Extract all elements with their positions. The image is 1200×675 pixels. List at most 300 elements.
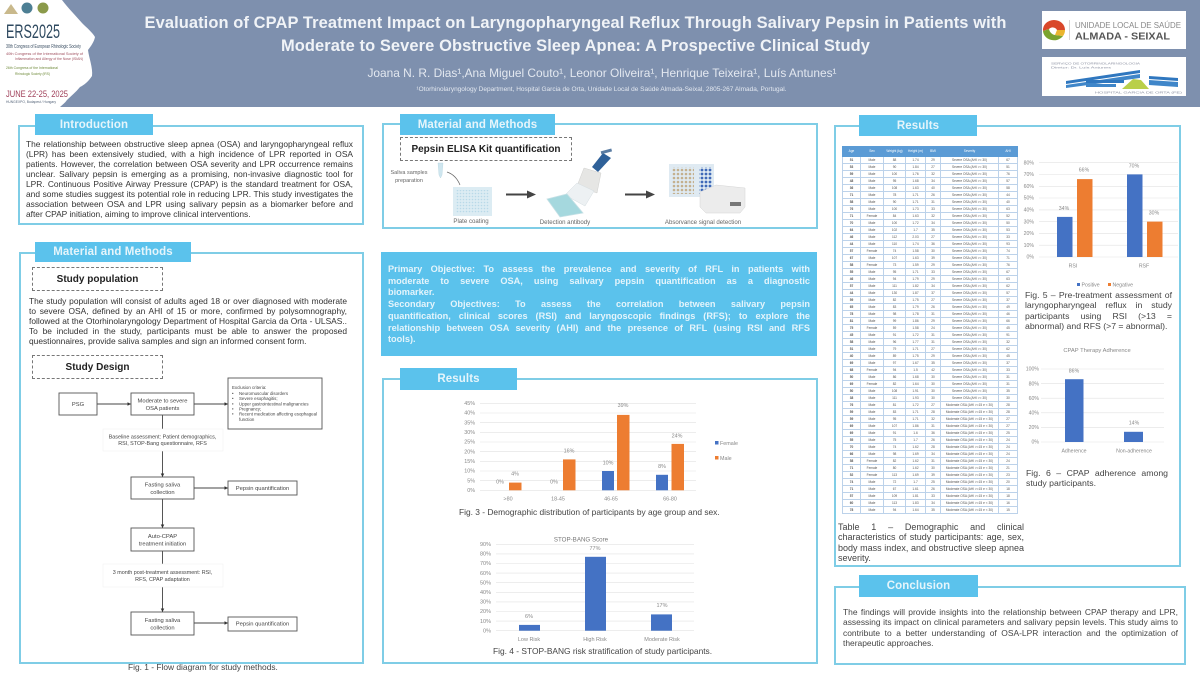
table: participant characteristics: Female — [867, 214, 877, 218]
bar chart: age group and sex: 24% — [672, 434, 683, 440]
table: participant characteristics: 94 — [893, 276, 896, 280]
table: participant characteristics: 113 — [892, 500, 897, 504]
table: participant characteristics: 24 — [1006, 438, 1010, 442]
bar chart: RSI and RFS: 30% — [1149, 210, 1160, 216]
logo: Hospital Garcia de Orta — [1042, 57, 1186, 96]
bar chart: STOP-BANG score: 20% — [480, 609, 491, 615]
table: participant characteristics: 74 — [893, 248, 896, 252]
box: fasting saliva collection 2: collection — [150, 626, 175, 632]
box: baseline assessment: RSI, STOP-Bang questionnaire, RFS — [118, 441, 207, 447]
bar chart: STOP-BANG score: 50% — [480, 580, 491, 586]
table: participant characteristics: 1.7 — [913, 438, 918, 442]
table: participant characteristics: 1.69 — [912, 452, 919, 456]
caption: figure 6: study participants. — [1026, 478, 1096, 488]
table: participant characteristics: 1.74 — [912, 242, 919, 246]
bar chart: RSI and RFS: 60% — [1024, 184, 1034, 190]
table: participant characteristics: Moderate OSA (AHI >=15 e < 30) — [946, 508, 993, 512]
table: participant characteristics: 59 — [850, 410, 853, 414]
box: 3 month assessment: RFS, CPAP adaptation — [135, 577, 190, 583]
table: participant characteristics: 28 — [931, 444, 935, 448]
table: participant characteristics: 67 — [1006, 270, 1010, 274]
bar chart: RSI and RFS: 80% — [1024, 160, 1034, 166]
text block: objectives: moderate to severe OSA, using salivary pepsin quantification as a diagnostic — [388, 276, 810, 286]
heading: Results — [859, 115, 977, 136]
bar chart: age group and sex: 0% — [467, 488, 475, 494]
table: participant characteristics: Moderate OSA (AHI >=15 e < 30) — [946, 444, 993, 448]
conference logo: ERS2025: HUNGEXPO, Budapest / Hungary — [6, 99, 56, 104]
text block: introduction: association between OSA and LPR using salivary pepsin as a biomarker before and — [26, 199, 353, 209]
table: participant characteristics: Male — [869, 304, 875, 308]
table: participant characteristics: 1.84 — [912, 164, 919, 168]
table: participant characteristics: 62 — [1006, 284, 1010, 288]
text block: introduction: (LPR) has been extensively studied, with a high incidence of LPR reported in OSA — [26, 149, 353, 159]
caption: table 1: body mass index, and obstructive sleep apnea — [838, 542, 1024, 552]
table: participant characteristics: 36 — [850, 186, 853, 190]
panel: material and methods, study population and design — [19, 242, 364, 664]
table: participant characteristics: Severe OSA (AHI >= 30) — [952, 284, 987, 288]
box: exclusion criteria: • — [232, 402, 234, 406]
table: participant characteristics: 63 — [1006, 206, 1010, 210]
table: participant characteristics: 27 — [1006, 416, 1010, 420]
bar chart: CPAP therapy adherence: Adherence — [1061, 448, 1087, 454]
table: participant characteristics: 1.77 — [912, 340, 919, 344]
table: participant characteristics: Severe OSA (AHI >= 30) — [952, 220, 987, 224]
table: participant characteristics: 76 — [1006, 262, 1010, 266]
table: participant characteristics: Severe OSA (AHI >= 30) — [952, 298, 987, 302]
conference logo: ERS2025: JUNE 22-25, 2025 — [6, 89, 68, 100]
table: participant characteristics: 27 — [931, 402, 935, 406]
table: participant characteristics: Severe OSA (AHI >= 30) — [952, 192, 987, 196]
table: participant characteristics: 51 — [850, 346, 853, 350]
table: participant characteristics: 1.82 — [912, 284, 919, 288]
bar chart: age group and sex: 10% — [603, 460, 614, 466]
icon: sample tube — [438, 163, 443, 178]
bar chart: age group and sex: 0% — [496, 480, 504, 486]
table: participant characteristics: Age — [849, 149, 854, 153]
text block: conclusion: The findings will provide insights into the relationship between CPAP therapy and LPR, — [843, 607, 1178, 617]
table: participant characteristics: 71 — [850, 486, 853, 490]
icon: curved arrow — [447, 172, 460, 185]
panel: introduction — [18, 114, 364, 225]
table: participant characteristics: 102 — [892, 228, 897, 232]
label: detection antibody: Detection antibody — [540, 219, 591, 226]
label: saliva samples preparation — [390, 170, 428, 184]
box: moderate to severe OSA: OSA patients — [146, 406, 180, 412]
table: participant characteristics: 2.03 — [912, 234, 919, 238]
box: exclusion criteria: Exclusion criteria: — [232, 385, 266, 390]
table: participant characteristics: 90 — [893, 200, 896, 204]
table: participant characteristics: 95 — [893, 416, 896, 420]
table: participant characteristics: 1.87 — [912, 290, 919, 294]
table: participant characteristics: Female — [867, 262, 877, 266]
arrow: step one to two — [506, 190, 536, 198]
table: participant characteristics: 90 — [893, 164, 896, 168]
text block: study population: questionnaires, provide saliva samples and sign an informed consent form. — [29, 336, 306, 346]
table: participant characteristics: 1.68 — [912, 178, 919, 182]
text block: objectives: biomarker. — [388, 287, 434, 297]
table: participant characteristics: 49 — [1006, 304, 1010, 308]
bar chart: age group and sex: 0% — [550, 480, 558, 486]
table: participant characteristics: 98 — [893, 452, 896, 456]
table: participant characteristics: 37 — [1006, 360, 1010, 364]
table: participant characteristics: 71 — [850, 466, 853, 470]
title: Moderate to Severe Obstructive Sleep Apnea: A Prospective Clinical Study — [281, 36, 870, 54]
table: participant characteristics: 32 — [931, 416, 935, 420]
heading: Material and Methods — [35, 242, 191, 262]
table: participant characteristics: Severe OSA (AHI >= 30) — [952, 214, 987, 218]
bar chart: CPAP therapy adherence: 20% — [1029, 425, 1039, 431]
table: participant characteristics: 15 — [1006, 508, 1010, 512]
table: participant characteristics: 69 — [850, 360, 853, 364]
caption: table 1: Table 1 – Demographic and clinical — [838, 522, 1024, 532]
logo: Hospital Garcia de Orta: HOSPITAL GARCIA DE ORTA (FE) — [1095, 90, 1182, 94]
caption: figure 5: participants using RSI (>13 = — [1025, 311, 1172, 321]
bar chart: age group and sex: Male — [720, 456, 732, 462]
bar chart: STOP-BANG score: 0% — [483, 628, 491, 634]
table: participant characteristics: 1.74 — [912, 158, 919, 162]
table: participant characteristics: 96 — [893, 340, 896, 344]
table: participant characteristics: Male — [869, 494, 875, 498]
bar chart: RSI and RFS: RSI — [1069, 264, 1077, 270]
arrows — [97, 404, 228, 623]
title: Evaluation of CPAP Treatment Impact on Laryngopharyngeal Reflux Through Salivary Pepsin in Patients with — [145, 14, 1006, 32]
table: participant characteristics: 29 — [931, 318, 935, 322]
table: participant characteristics: 1.7 — [913, 228, 918, 232]
table: participant characteristics: 109 — [892, 494, 897, 498]
caption: figure 6: Fig. 6 – CPAP adherence among — [1026, 468, 1168, 478]
table: participant characteristics: 53 — [850, 164, 853, 168]
table: participant characteristics: 30 — [931, 382, 935, 386]
table: participant characteristics: 73 — [893, 262, 896, 266]
bar chart: RSI and RFS: RSF — [1139, 264, 1149, 270]
bar chart: CPAP therapy adherence: 0% — [1032, 440, 1039, 446]
table: participant characteristics: 79 — [893, 346, 896, 350]
box: exclusion criteria: Neuromuscular disorders — [239, 391, 289, 396]
table: participant characteristics: Severe OSA (AHI >= 30) — [952, 164, 987, 168]
table: participant characteristics: 1.63 — [912, 214, 919, 218]
table: participant characteristics: 59 — [893, 326, 896, 330]
table: participant characteristics: 29 — [931, 354, 935, 358]
table: participant characteristics: 130 — [892, 290, 897, 294]
ELISA workflow illustration — [390, 148, 746, 226]
table: participant characteristics: 1.6 — [913, 430, 918, 434]
bar chart: age group and sex: 40% — [464, 411, 475, 417]
bar chart: STOP-BANG score: 80% — [480, 552, 491, 558]
table: participant characteristics: 76 — [850, 402, 853, 406]
table: participant characteristics: 57 — [1006, 290, 1010, 294]
text block: objectives: relationship between OSA severity (AHI) and the presence of RFL (using RSI and RFS — [388, 323, 810, 333]
panel frame — [19, 252, 364, 664]
table: participant characteristics: Male — [869, 410, 875, 414]
table: participant characteristics: 81 — [893, 402, 896, 406]
table: participant characteristics: 58 — [850, 262, 853, 266]
table: participant characteristics: 80 — [893, 466, 896, 470]
table: participant characteristics: Severe OSA (AHI >= 30) — [952, 256, 987, 260]
bar chart: age group and sex: 8% — [658, 464, 666, 470]
box: exclusion criteria: Recent medication affecting esophageal — [239, 412, 317, 416]
table: participant characteristics: 108 — [892, 388, 897, 392]
box: moderate to severe OSA: Moderate to severe — [138, 398, 187, 404]
table: participant characteristics: Male — [869, 424, 875, 428]
table: participant characteristics: Severe OSA (AHI >= 30) — [952, 228, 987, 232]
table: participant characteristics: 94 — [893, 508, 896, 512]
table: participant characteristics: 32 — [931, 214, 935, 218]
table: participant characteristics: 60 — [850, 500, 853, 504]
table: participant characteristics: 1.64 — [912, 382, 919, 386]
table: participant characteristics: 28 — [1006, 402, 1010, 406]
table: participant characteristics: 65 — [850, 304, 853, 308]
table: participant characteristics: Male — [869, 430, 875, 434]
table: participant characteristics: 111 — [892, 396, 897, 400]
table: participant characteristics: Male — [869, 340, 875, 344]
table: participant characteristics: 71 — [850, 192, 853, 196]
table: participant characteristics: 33 — [931, 206, 935, 210]
table: participant characteristics: 18 — [1006, 486, 1010, 490]
text block: conclusion — [843, 607, 1178, 648]
caption: figure 6 — [1026, 468, 1168, 488]
table: participant characteristics: 95 — [893, 178, 896, 182]
table: participant characteristics: 1.62 — [912, 458, 919, 462]
table: participant characteristics: 78 — [850, 312, 853, 316]
box: fasting saliva collection: Fasting saliva — [145, 482, 181, 488]
table: participant characteristics: Male — [869, 346, 875, 350]
table: participant characteristics: 86 — [893, 374, 896, 378]
bar chart: RSI and RFS: 40% — [1024, 208, 1034, 214]
box: 3 month assessment — [103, 564, 223, 587]
table: participant characteristics: 69 — [850, 382, 853, 386]
logo: Hospital Garcia de Orta: Diretor: Dr. Luís Antunes — [1051, 66, 1112, 70]
table: participant characteristics: Severe OSA (AHI >= 30) — [952, 248, 987, 252]
table: participant characteristics: 95 — [893, 270, 896, 274]
table: participant characteristics: 46 — [850, 276, 853, 280]
box: baseline assessment — [103, 429, 223, 451]
table: participant characteristics: Moderate OSA (AHI >=15 e < 30) — [946, 410, 993, 414]
table: participant characteristics: Male — [869, 486, 875, 490]
table: participant characteristics: 84 — [893, 214, 896, 218]
text block: study population: to severe OSA, defined by an AHI of 15 or more, confirmed by polysomnography, — [29, 306, 347, 316]
table: participant characteristics: 63 — [1006, 276, 1010, 280]
table: participant characteristics: 74 — [1006, 248, 1010, 252]
table: participant characteristics: 1.75 — [912, 298, 919, 302]
bar chart: CPAP therapy adherence: 86% — [1069, 368, 1080, 374]
bar chart: age group and sex: 39% — [618, 403, 629, 409]
bar chart: CPAP therapy adherence: 100% — [1026, 367, 1039, 373]
subheading: Study population: Study population — [57, 274, 138, 284]
table: participant characteristics: 1.79 — [912, 276, 919, 280]
table: participant characteristics: 107 — [892, 256, 897, 260]
table: participant characteristics: Moderate OSA (AHI >=15 e < 30) — [946, 472, 993, 476]
table: participant characteristics: 35 — [931, 508, 935, 512]
text block: conclusion: contribute to a better understanding of OSA-LPR interaction and the optimization of — [843, 628, 1178, 638]
table: participant characteristics: Male — [869, 480, 875, 484]
bar chart: STOP-BANG score: Low Risk — [518, 637, 540, 643]
table: participant characteristics: Moderate OSA (AHI >=15 e < 30) — [946, 430, 993, 434]
panel: conclusion — [834, 575, 1186, 665]
bar chart: age group and sex: 4% — [511, 472, 519, 478]
table: participant characteristics: 83 — [893, 304, 896, 308]
table: participant characteristics: Female — [867, 466, 877, 470]
bar chart: age group and sex: 25% — [464, 440, 475, 446]
table: participant characteristics: 52 — [1006, 214, 1010, 218]
table: participant characteristics: 91 — [893, 430, 896, 434]
table: participant characteristics: 1.72 — [912, 332, 919, 336]
table: participant characteristics: 30 — [931, 396, 935, 400]
table: participant characteristics: 36 — [931, 430, 935, 434]
table: participant characteristics: Severe OSA (AHI >= 30) — [952, 360, 987, 364]
text block: objectives — [388, 264, 810, 344]
bar chart: RSI and RFS: 34% — [1059, 206, 1070, 212]
subheading: Study Design: Study Design — [66, 362, 129, 372]
table: participant characteristics: 45 — [1006, 354, 1010, 358]
text block: objectives: Secondary Objectives: To assess the correlation between salivary pepsin — [388, 299, 810, 309]
bar chart: RSI and RFS: 10% — [1024, 243, 1034, 249]
box: pepsin quantification 2: Pepsin quantification — [236, 622, 289, 628]
table: participant characteristics: Male — [869, 256, 875, 260]
flow diagram — [58, 378, 322, 636]
box: fasting saliva collection 2 — [131, 612, 194, 635]
table: participant characteristics: 93 — [1006, 242, 1010, 246]
table: participant characteristics: Male — [869, 298, 875, 302]
bar chart: RSI and RFS: 70% — [1024, 172, 1034, 178]
bar chart: age group and sex: Female — [720, 441, 738, 447]
table: participant characteristics: Male — [869, 178, 875, 182]
table: participant characteristics: Moderate OSA (AHI >=15 e < 30) — [946, 500, 993, 504]
heading: Results — [400, 368, 517, 390]
table: participant characteristics: Severity — [964, 149, 975, 153]
box: exclusion criteria: • — [232, 396, 234, 401]
heading: Conclusion — [859, 575, 978, 597]
table: participant characteristics: 30 — [931, 388, 935, 392]
bar chart: CPAP therapy adherence: CPAP Therapy Adherence — [1063, 348, 1131, 354]
table: participant characteristics: 75 — [893, 438, 896, 442]
table: participant characteristics: 55 — [850, 438, 853, 442]
table: participant characteristics: 1.7 — [913, 480, 918, 484]
panel frame — [382, 378, 818, 664]
text block: conclusion: therapeutic approaches. — [843, 638, 934, 648]
table: participant characteristics: 67 — [1006, 158, 1010, 162]
table: participant characteristics: 58 — [850, 340, 853, 344]
table: participant characteristics: 31 — [931, 332, 935, 336]
table: participant characteristics: Female — [867, 326, 877, 330]
logo: Unidade Local de Saude Almada-Seixal — [1042, 11, 1186, 49]
table: participant characteristics: 31 — [931, 340, 935, 344]
subheading: Pepsin ELISA Kit quantification: Pepsin ELISA Kit quantification — [411, 144, 561, 154]
table: participant characteristics: Severe OSA (AHI >= 30) — [952, 262, 987, 266]
table: participant characteristics: 38 — [850, 396, 853, 400]
table: participant characteristics: 59 — [850, 298, 853, 302]
table: participant characteristics: 33 — [1006, 368, 1010, 372]
table: participant characteristics: Severe OSA (AHI >= 30) — [952, 242, 987, 246]
conference logo: ERS2025: Inflammation and Allergy of the Nose (ISIAN) — [15, 57, 83, 61]
title — [145, 14, 1006, 54]
table: participant characteristics: 33 — [931, 270, 935, 274]
table: participant characteristics: 50 — [1006, 220, 1010, 224]
table: participant characteristics: 57 — [1006, 178, 1010, 182]
table: participant characteristics: Moderate OSA (AHI >=15 e < 30) — [946, 466, 993, 470]
bar chart: STOP-BANG score: 30% — [480, 600, 491, 606]
table: participant characteristics: 1.5 — [913, 368, 918, 372]
table: participant characteristics: 40 — [931, 186, 935, 190]
table: participant characteristics: 59 — [850, 416, 853, 420]
table: participant characteristics: 68 — [850, 368, 853, 372]
table: participant characteristics: 32 — [1006, 340, 1010, 344]
table: participant characteristics: 112 — [892, 234, 897, 238]
table: participant characteristics: 25 — [931, 480, 935, 484]
table: participant characteristics: 37 — [931, 290, 935, 294]
box: Auto-CPAP: Auto-CPAP — [148, 534, 177, 540]
conference logo: ERS2025: Rhinologic Society (IRS) — [15, 72, 50, 76]
table: participant characteristics: 62 — [1006, 346, 1010, 350]
table: participant characteristics: Male — [869, 206, 875, 210]
table: participant characteristics: Severe OSA (AHI >= 30) — [952, 374, 987, 378]
bar chart: age group and sex: 46-65 — [604, 496, 618, 502]
table: participant characteristics: Male — [869, 354, 875, 358]
table: participant characteristics: 58 — [1006, 186, 1010, 190]
table: participant characteristics: 31 — [931, 312, 935, 316]
table: participant characteristics: 100 — [892, 220, 897, 224]
table: participant characteristics: BMI — [930, 149, 936, 153]
table: participant characteristics: Severe OSA (AHI >= 30) — [952, 172, 987, 176]
table: participant characteristics: 97 — [893, 360, 896, 364]
table: participant characteristics: Male — [869, 332, 875, 336]
heading: Introduction — [35, 114, 153, 135]
table: participant characteristics: 58 — [850, 200, 853, 204]
table: participant characteristics: 37 — [1006, 298, 1010, 302]
table: participant characteristics: 52 — [850, 472, 853, 476]
table: participant characteristics: 39 — [931, 256, 935, 260]
table: participant characteristics: 20 — [1006, 480, 1010, 484]
table: participant characteristics: 64 — [850, 228, 853, 232]
table: participant characteristics: Male — [869, 242, 875, 246]
table: participant characteristics: Male — [869, 164, 875, 168]
caption: figure 5: abnormal) and RFS (>7 = abnormal). — [1025, 321, 1167, 331]
table: participant characteristics: 35 — [1006, 388, 1010, 392]
table: participant characteristics: Male — [869, 172, 875, 176]
table: participant characteristics: 1.86 — [912, 424, 919, 428]
bar chart: STOP-BANG score: 77% — [589, 546, 601, 552]
table: participant characteristics: 48 — [850, 178, 853, 182]
box: exclusion criteria — [228, 378, 322, 429]
text block: introduction — [26, 139, 353, 219]
caption: figure 3: Fig. 3 - Demographic distribution of participants by age group and sex. — [459, 507, 720, 517]
panel frame — [834, 586, 1186, 665]
table: participant characteristics: 29 — [931, 158, 935, 162]
table: participant characteristics: Severe OSA (AHI >= 30) — [952, 270, 987, 274]
box: 3 month assessment: 3 month post-treatment assessment: RSI, — [113, 570, 213, 576]
table: participant characteristics: 27 — [931, 346, 935, 350]
text block: introduction: and some studies suggest its potential role in reducing LPR. This study investigates the — [26, 189, 353, 199]
bar chart: RSI and RFS — [1024, 160, 1178, 288]
table: participant characteristics: Male — [869, 312, 875, 316]
table: participant characteristics: Moderate OSA (AHI >=15 e < 30) — [946, 424, 993, 428]
table: participant characteristics: 50 — [850, 388, 853, 392]
table: participant characteristics: 67 — [850, 256, 853, 260]
table: participant characteristics: 1.58 — [912, 326, 919, 330]
table: participant characteristics: 1.71 — [912, 410, 919, 414]
bar chart: age group and sex: 18-45 — [551, 496, 565, 502]
table: participant characteristics: 26 — [931, 438, 935, 442]
table: participant characteristics: 34 — [931, 178, 935, 182]
panel frame — [834, 125, 1181, 567]
table: participant characteristics: 44 — [850, 242, 853, 246]
text block: introduction: LPR. Continuous Positive Airway Pressure (CPAP) is the standard treatment for OSA, — [26, 179, 353, 189]
table: participant characteristics: 67 — [893, 486, 896, 490]
table: participant characteristics: 1.81 — [912, 494, 919, 498]
table: participant characteristics: 1.62 — [912, 444, 919, 448]
table: participant characteristics: 23 — [1006, 472, 1010, 476]
table: participant characteristics: 25 — [1006, 430, 1010, 434]
conference logo: ERS2025 — [0, 0, 95, 107]
